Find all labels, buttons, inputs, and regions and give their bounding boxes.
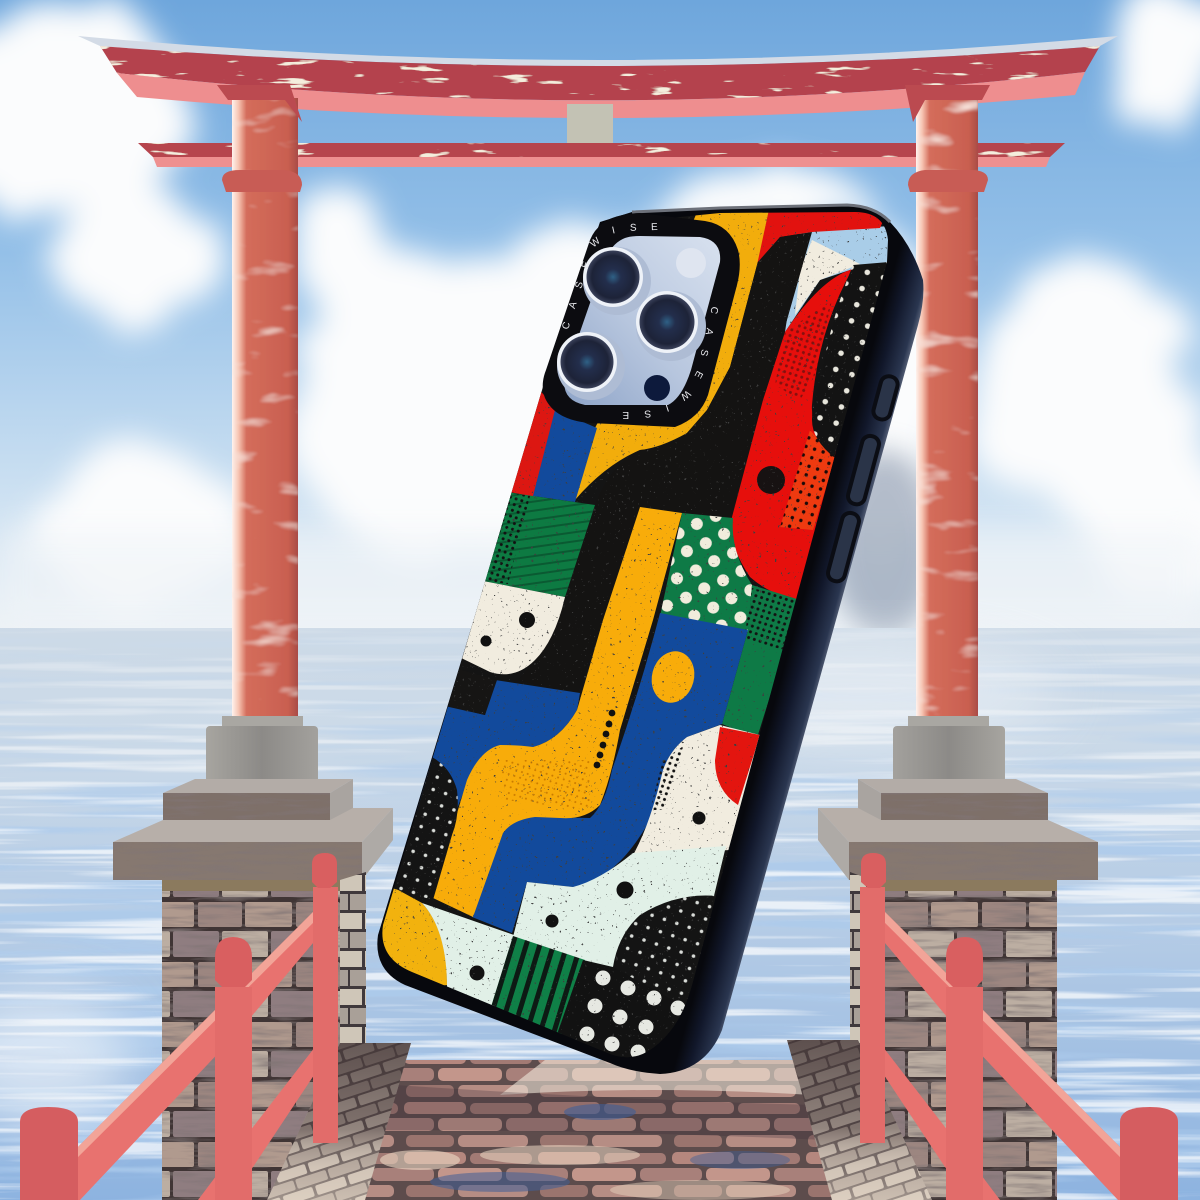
bottom left mint xyxy=(422,903,514,1010)
lens: middle xyxy=(636,291,706,361)
left stone base xyxy=(113,716,393,880)
right railing xyxy=(860,853,1178,1200)
top beam xyxy=(78,36,1118,118)
cream triangle xyxy=(795,240,860,315)
black panel with big dots xyxy=(555,960,690,1065)
black panel left with dots xyxy=(385,755,458,900)
lens: bottom xyxy=(557,332,625,400)
black band xyxy=(637,232,812,452)
lens: top xyxy=(583,247,651,315)
sky background xyxy=(0,0,1200,630)
black small block xyxy=(448,680,497,715)
right stone base xyxy=(818,716,1098,880)
green stripes panel xyxy=(490,936,585,1040)
microphone sensor xyxy=(644,375,670,401)
right pillar xyxy=(905,85,990,720)
mint lower panel xyxy=(514,846,726,967)
black dotted panel xyxy=(812,262,889,458)
orange halftone panel xyxy=(780,430,835,530)
artwork on the case back xyxy=(370,200,900,1070)
left pillar xyxy=(217,85,302,720)
speckle texture xyxy=(370,200,900,1070)
yellow circle xyxy=(652,651,694,703)
torii gate xyxy=(78,36,1118,720)
flash xyxy=(676,248,706,278)
yellow main band xyxy=(433,507,682,917)
dark red halftone xyxy=(775,300,832,400)
clouds xyxy=(0,0,1200,630)
glass plate xyxy=(564,236,720,405)
top right pale blue panel xyxy=(785,226,890,332)
big red shape xyxy=(731,268,853,600)
green right panel xyxy=(722,585,800,738)
cream panel with dots xyxy=(462,581,565,674)
stone path xyxy=(267,1040,932,1200)
green striped panel xyxy=(478,492,595,597)
yellow band under camera xyxy=(575,205,770,500)
brand text: upper left ring: CASEWISE xyxy=(562,223,658,329)
case body xyxy=(377,205,923,1074)
phone shadow on cloud xyxy=(830,450,940,640)
left brick column xyxy=(162,872,366,1200)
centre strut xyxy=(567,104,613,143)
water xyxy=(0,628,1200,1200)
right brick column xyxy=(850,872,1057,1200)
blue main panel xyxy=(472,613,748,933)
bottom left yellow xyxy=(370,880,447,990)
red corner xyxy=(758,212,882,262)
left railing xyxy=(20,853,338,1200)
left blue panel xyxy=(416,680,580,812)
blue left block xyxy=(533,410,597,502)
side buttons xyxy=(826,374,899,583)
polka green panel xyxy=(660,513,752,632)
cream lower panel xyxy=(633,725,760,855)
camera island xyxy=(542,213,740,427)
puddles and sun patches xyxy=(564,1104,636,1120)
phone with case xyxy=(377,204,924,1074)
red lower block xyxy=(715,727,760,805)
black dot on red xyxy=(757,466,785,494)
lower beam xyxy=(138,143,1065,167)
red left block xyxy=(512,392,555,496)
black half circle with small dots xyxy=(600,895,725,1040)
dot string xyxy=(594,710,615,768)
brand text: lower right ring: CASEWISE xyxy=(622,307,718,419)
